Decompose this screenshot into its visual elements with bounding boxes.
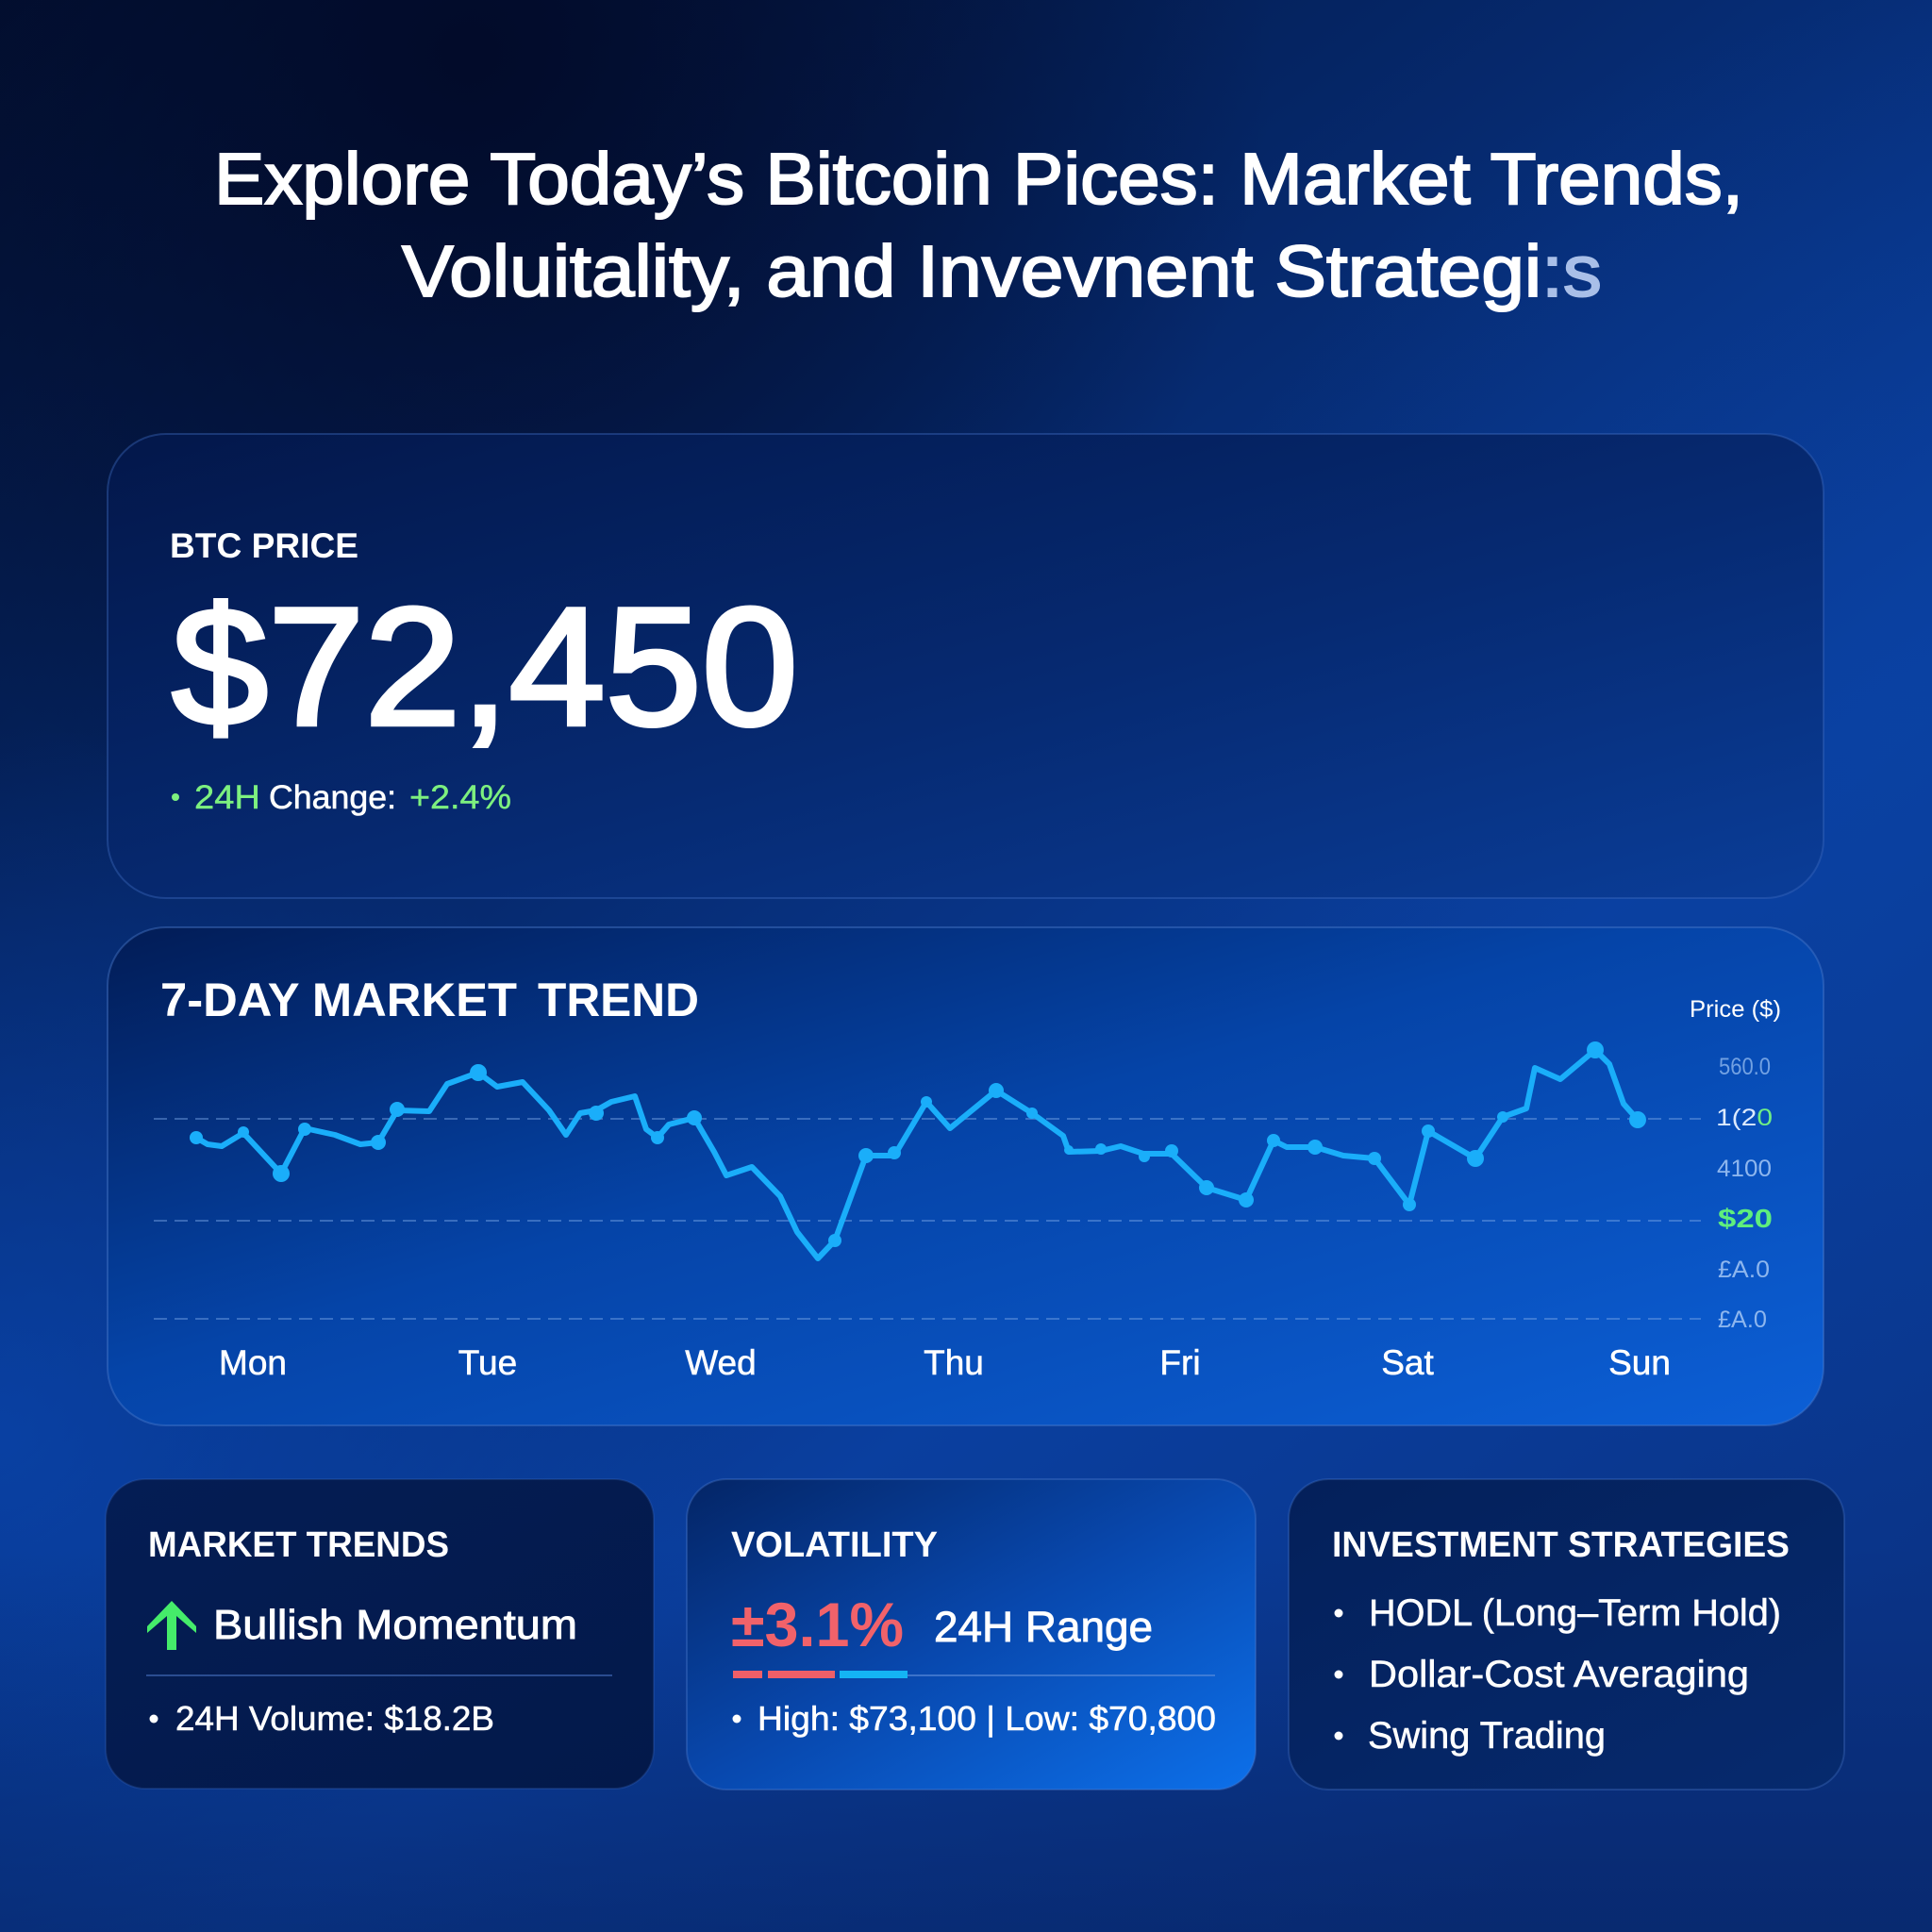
24H change [172, 779, 511, 816]
volume stat: 24H Volume: $18.2B [175, 1699, 494, 1738]
24H change: 24H [194, 779, 260, 816]
title [214, 139, 1743, 312]
bullish momentum label: Bullish Momentum [213, 1602, 577, 1648]
day axis labels: Fri [1159, 1343, 1201, 1382]
panel: BTC price [108, 434, 1824, 898]
title: Explore Today’s Bitcoin Pices: Market Trends, [214, 139, 1743, 220]
price axis labels: £A.0 [1718, 1257, 1770, 1283]
panel: market trends [106, 1479, 654, 1789]
day axis labels [219, 1343, 1671, 1382]
strategy list: Swing Trading [1368, 1715, 1606, 1757]
chart heading: TREND [538, 974, 699, 1026]
volatility heading: VOLATILITY [731, 1525, 938, 1565]
divider and range bars [733, 1671, 1215, 1678]
panel: investment strategies [1289, 1479, 1844, 1790]
volatility value: ±3.1% [731, 1590, 904, 1659]
range label: 24H Range [934, 1603, 1153, 1651]
strategy list: HODL (Long–Term Hold) [1369, 1592, 1781, 1634]
day axis labels: Thu [924, 1343, 984, 1382]
24H change: +2.4% [409, 779, 511, 816]
market trends heading: MARKET TRENDS [148, 1525, 449, 1565]
price axis labels: 560.0 [1719, 1054, 1771, 1080]
panel: volatility [687, 1479, 1256, 1790]
high and low stat: High: $73,100 | Low: $70,800 [758, 1699, 1216, 1738]
chart heading [160, 974, 699, 1026]
chart heading: 7-DAY MARKET [160, 974, 517, 1026]
day axis labels: Sat [1381, 1343, 1434, 1382]
day axis labels: Mon [219, 1343, 287, 1382]
day axis labels: Tue [458, 1343, 517, 1382]
strategy list [1334, 1592, 1781, 1757]
icon: green up arrow [147, 1601, 196, 1650]
price axis labels: 1(20 [1716, 1105, 1773, 1131]
divider [146, 1674, 612, 1676]
price value: $72,450 [172, 573, 798, 760]
panel: 7-day market trend [108, 927, 1824, 1425]
price axis labels: £A.0 [1718, 1307, 1767, 1333]
strategies heading: INVESTMENT STRATEGIES [1332, 1525, 1790, 1565]
price axis labels: 4100 [1717, 1156, 1772, 1182]
24H change: Change: [269, 779, 396, 816]
day axis labels: Sun [1608, 1343, 1671, 1382]
day axis labels: Wed [685, 1343, 757, 1382]
price axis labels: $20 [1718, 1204, 1773, 1233]
line chart [154, 1041, 1701, 1319]
price axis labels [1716, 1054, 1773, 1333]
axis title: Price ($) [1690, 996, 1781, 1023]
label: BTC price: BTC PRICE [170, 526, 358, 565]
strategy list: Dollar-Cost Averaging [1369, 1654, 1749, 1695]
title: Voluitality, and Invevnent Strategi :s [402, 231, 1602, 312]
